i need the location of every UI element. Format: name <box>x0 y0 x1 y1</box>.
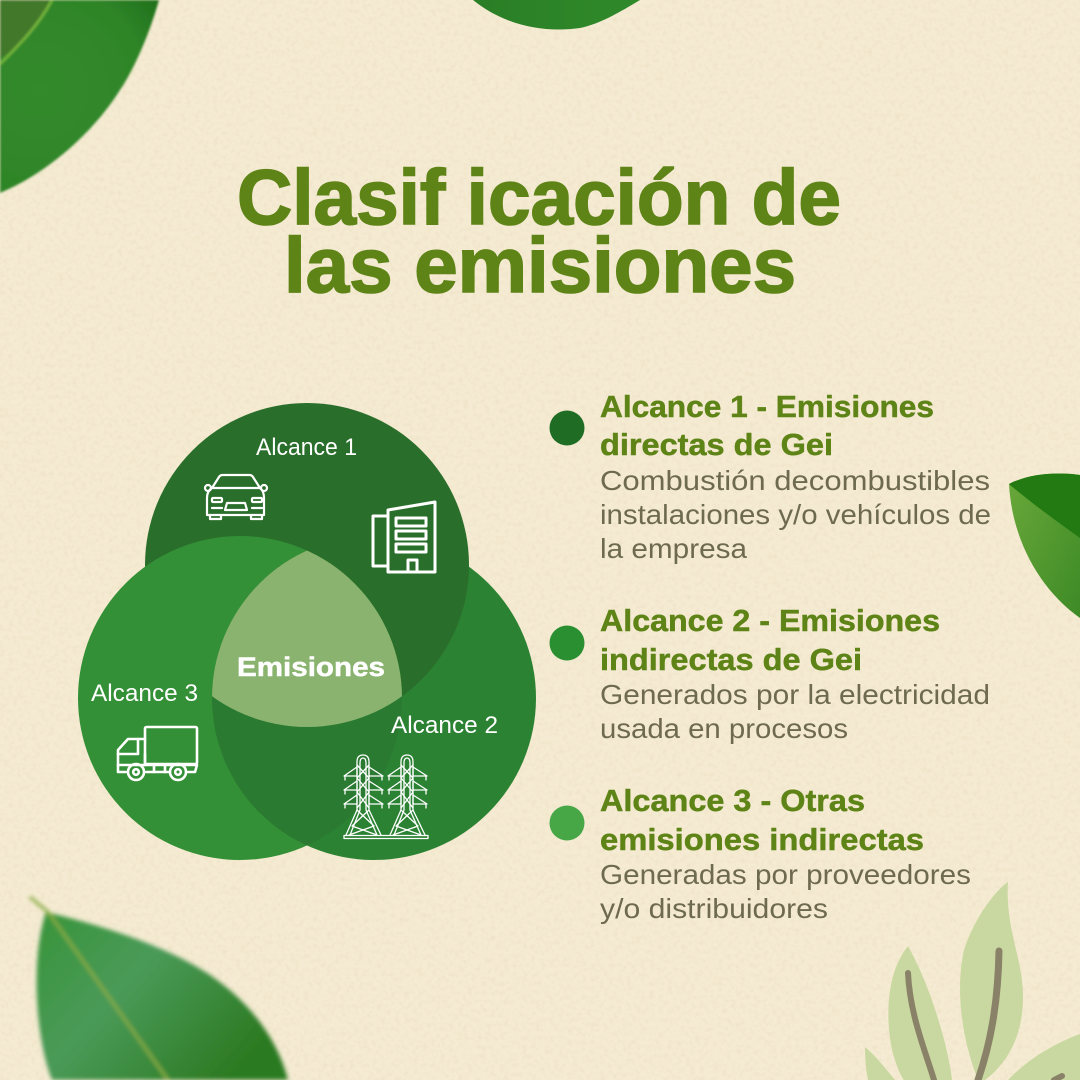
heading: alcance 1: directas de Gei <box>600 427 833 462</box>
heading: alcance 3: Alcance 3 - Otras <box>600 783 865 818</box>
description: alcance 1: Combustión decombustibles <box>600 465 990 496</box>
icon: car <box>205 475 267 519</box>
title <box>237 153 841 309</box>
circle: alcance 1 <box>145 403 469 727</box>
overlap: emisiones centre <box>212 550 402 727</box>
description: alcance 1: la empresa <box>600 533 747 564</box>
label: alcance 3: Alcance 3 <box>91 680 198 707</box>
bullet: alcance 3 <box>550 806 584 840</box>
description: alcance 3: Generadas por proveedores <box>600 859 971 890</box>
heading: alcance 2: Alcance 2 - Emisiones <box>600 603 940 638</box>
bullet: alcance 1 <box>550 410 584 446</box>
leaf: top left <box>0 0 159 193</box>
title: Clasif icación de <box>237 153 841 241</box>
pylon base <box>344 836 428 838</box>
heading: alcance 3 <box>600 783 924 857</box>
pylon: left <box>344 755 383 835</box>
heading: alcance 2: indirectas de Gei <box>600 642 862 677</box>
description: alcance 2: usada en procesos <box>600 713 848 744</box>
circle: alcance 3 <box>78 536 402 860</box>
icon: electricity pylons <box>344 755 428 838</box>
description: alcance 3 <box>600 859 971 924</box>
title: las emisiones <box>284 221 796 309</box>
venn diagram <box>78 403 536 860</box>
heading: alcance 1 <box>600 389 934 462</box>
heading: alcance 3: emisiones indirectas <box>600 822 924 857</box>
description: alcance 2 <box>600 679 990 744</box>
leaf: right edge <box>1009 474 1080 618</box>
description: alcance 3: y/o distribuidores <box>600 893 828 924</box>
label: alcance 2: Alcance 2 <box>391 712 498 739</box>
overlap: alcance 2 and 3 <box>212 696 402 846</box>
legend item: alcance 3 <box>550 783 971 924</box>
icon: truck <box>118 727 197 780</box>
heading: alcance 1: Alcance 1 - Emisiones <box>600 389 934 424</box>
legend item: alcance 2 <box>550 603 990 744</box>
legend item: alcance 1 <box>550 389 991 564</box>
decorative plant: bottom right <box>865 882 1080 1080</box>
bullet: alcance 2 <box>550 626 584 660</box>
leaf: bottom left <box>30 897 288 1080</box>
label: emisiones: Emisiones <box>237 652 385 682</box>
icon: office building <box>373 502 435 572</box>
description: alcance 2: Generados por la electricidad <box>600 679 990 710</box>
description: alcance 1 <box>600 465 991 564</box>
pylon: right <box>388 755 427 835</box>
circle: alcance 2 <box>212 536 536 860</box>
heading: alcance 2 <box>600 603 940 677</box>
description: alcance 1: instalaciones y/o vehículos de <box>600 499 991 530</box>
label: alcance 1: Alcance 1 <box>256 434 357 461</box>
leaf: top centre <box>473 0 640 30</box>
